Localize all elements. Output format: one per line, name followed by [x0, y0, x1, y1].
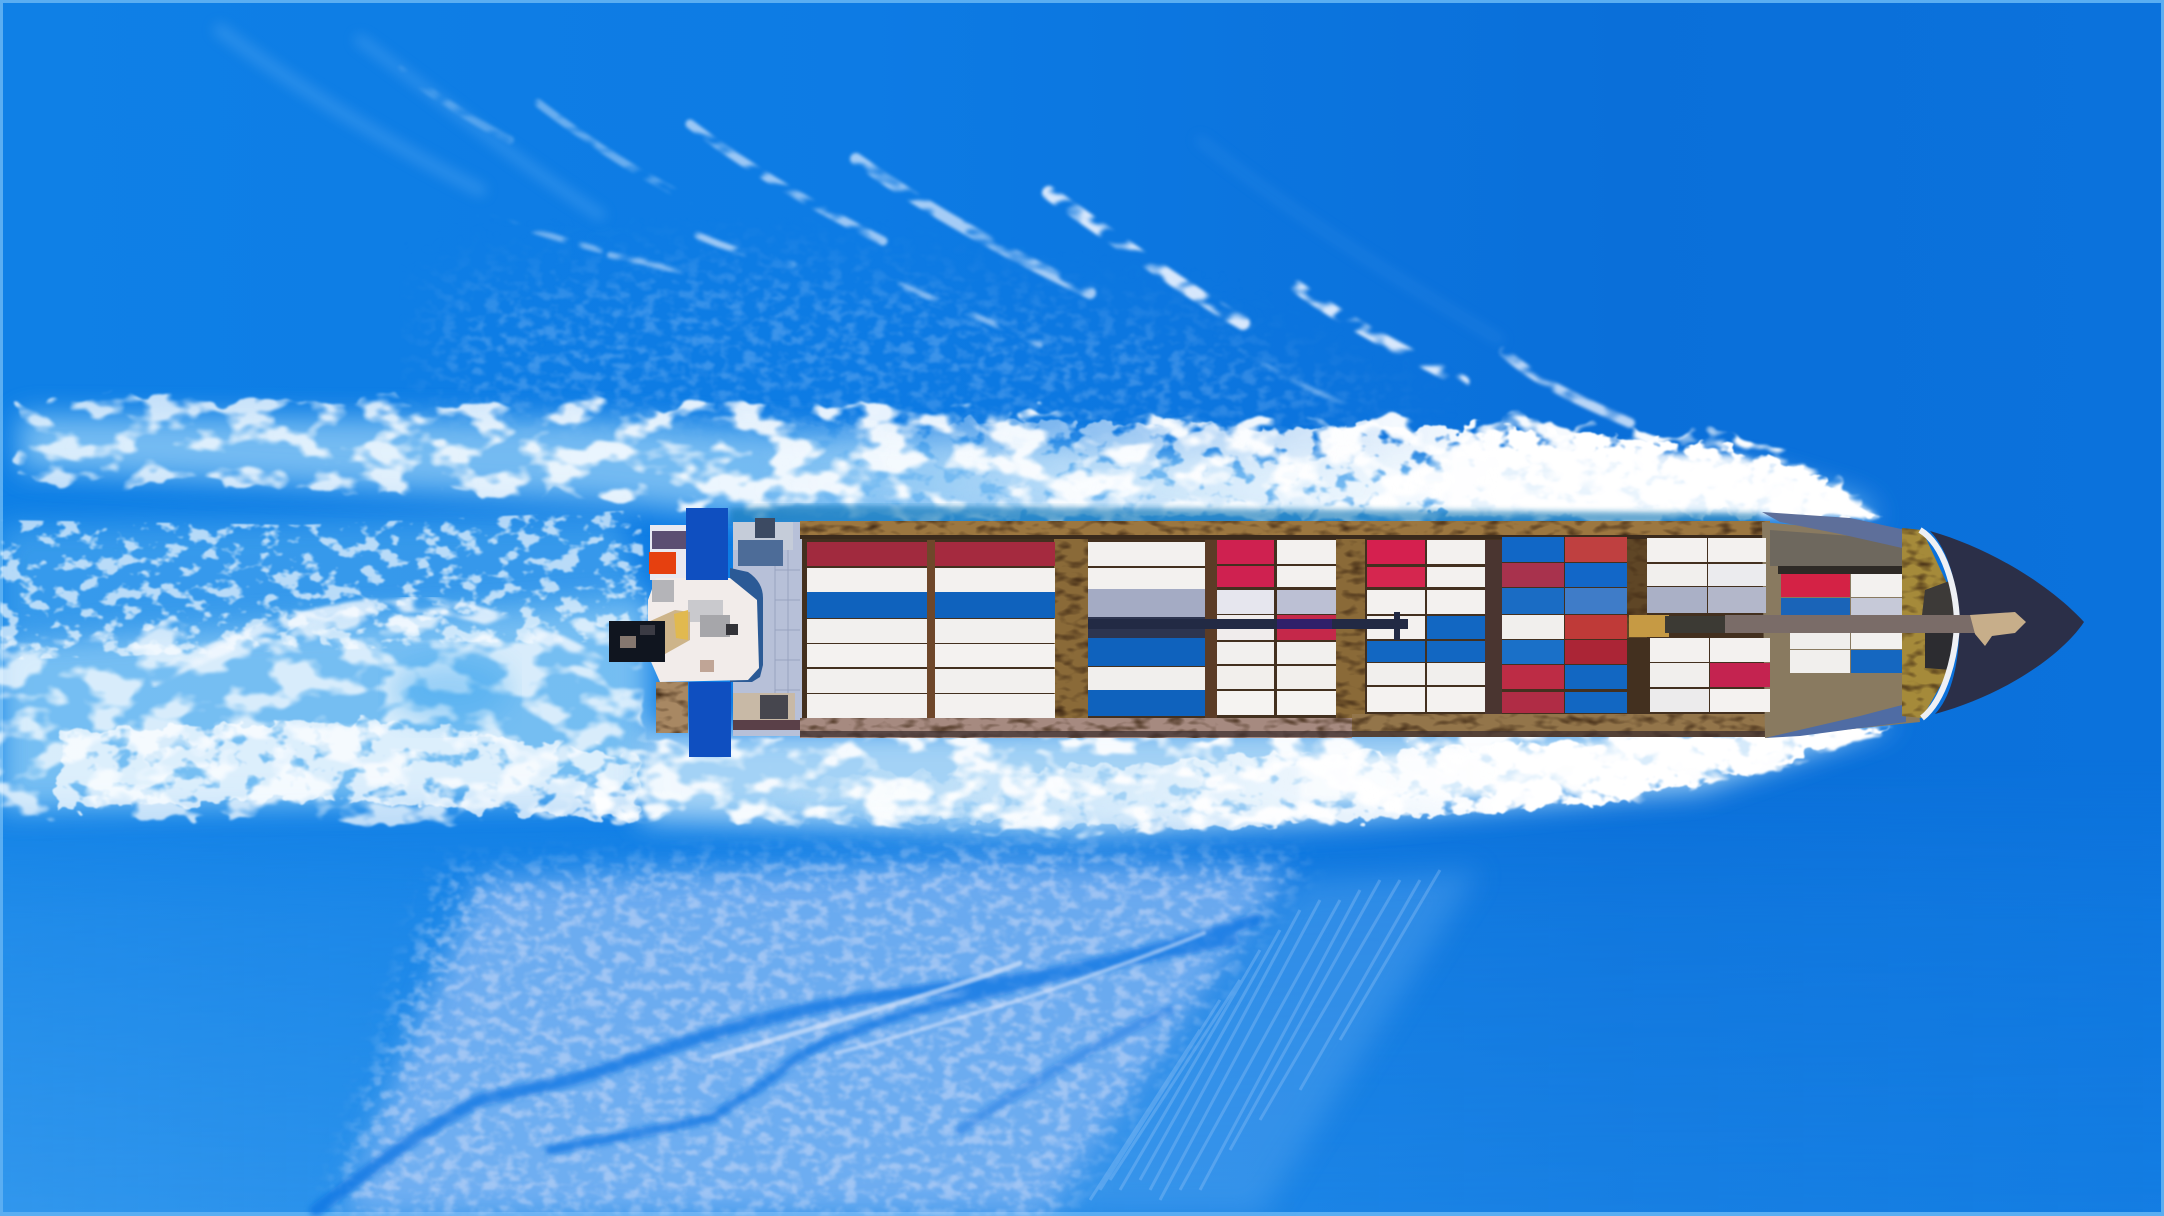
dark water shadow by hull	[730, 505, 1760, 524]
bay 8 containers	[1778, 566, 1911, 673]
blue bridge wing top	[686, 508, 728, 580]
blue bridge wing bottom	[689, 682, 731, 757]
black stern block	[609, 621, 665, 662]
wake: lower left spray and foam	[0, 510, 1000, 825]
bay 7 containers	[1647, 538, 1770, 712]
bow slivers	[1762, 512, 1906, 738]
bottom gunwale	[800, 714, 1772, 738]
hull hold	[802, 535, 1770, 721]
wake: lower foam band	[600, 722, 1900, 838]
crane beam	[1629, 612, 2026, 646]
aft deck machinery	[733, 518, 803, 730]
wake fan: lower pale water	[300, 820, 1480, 1216]
stern deck platform	[733, 522, 803, 736]
bow wave streaks upper sea	[400, 70, 1630, 423]
bay 3 containers	[1088, 542, 1205, 716]
tan aft block	[656, 682, 688, 733]
white hull line	[1920, 530, 1957, 718]
lifeboat area	[649, 525, 688, 580]
bay 2 containers	[935, 542, 1055, 718]
container ship	[609, 508, 2084, 757]
bow deck	[1762, 522, 1920, 738]
wake: upper foam band	[20, 396, 1882, 524]
top gunwale	[800, 521, 1770, 539]
upper ripple field	[417, 241, 1386, 440]
bay 4 containers	[1217, 540, 1336, 715]
bay 6 containers	[1502, 537, 1627, 713]
bay 1 containers	[807, 542, 927, 718]
bay 5 containers	[1367, 540, 1485, 712]
superstructure	[648, 568, 763, 682]
fine wave lines	[1090, 870, 1440, 1200]
hatch gap strips	[927, 538, 1647, 720]
faint upper swells	[220, 30, 1500, 340]
bow hull dark	[1930, 531, 2084, 714]
dark lashing bar	[1088, 612, 1408, 640]
yellow bow band	[1902, 528, 1955, 718]
